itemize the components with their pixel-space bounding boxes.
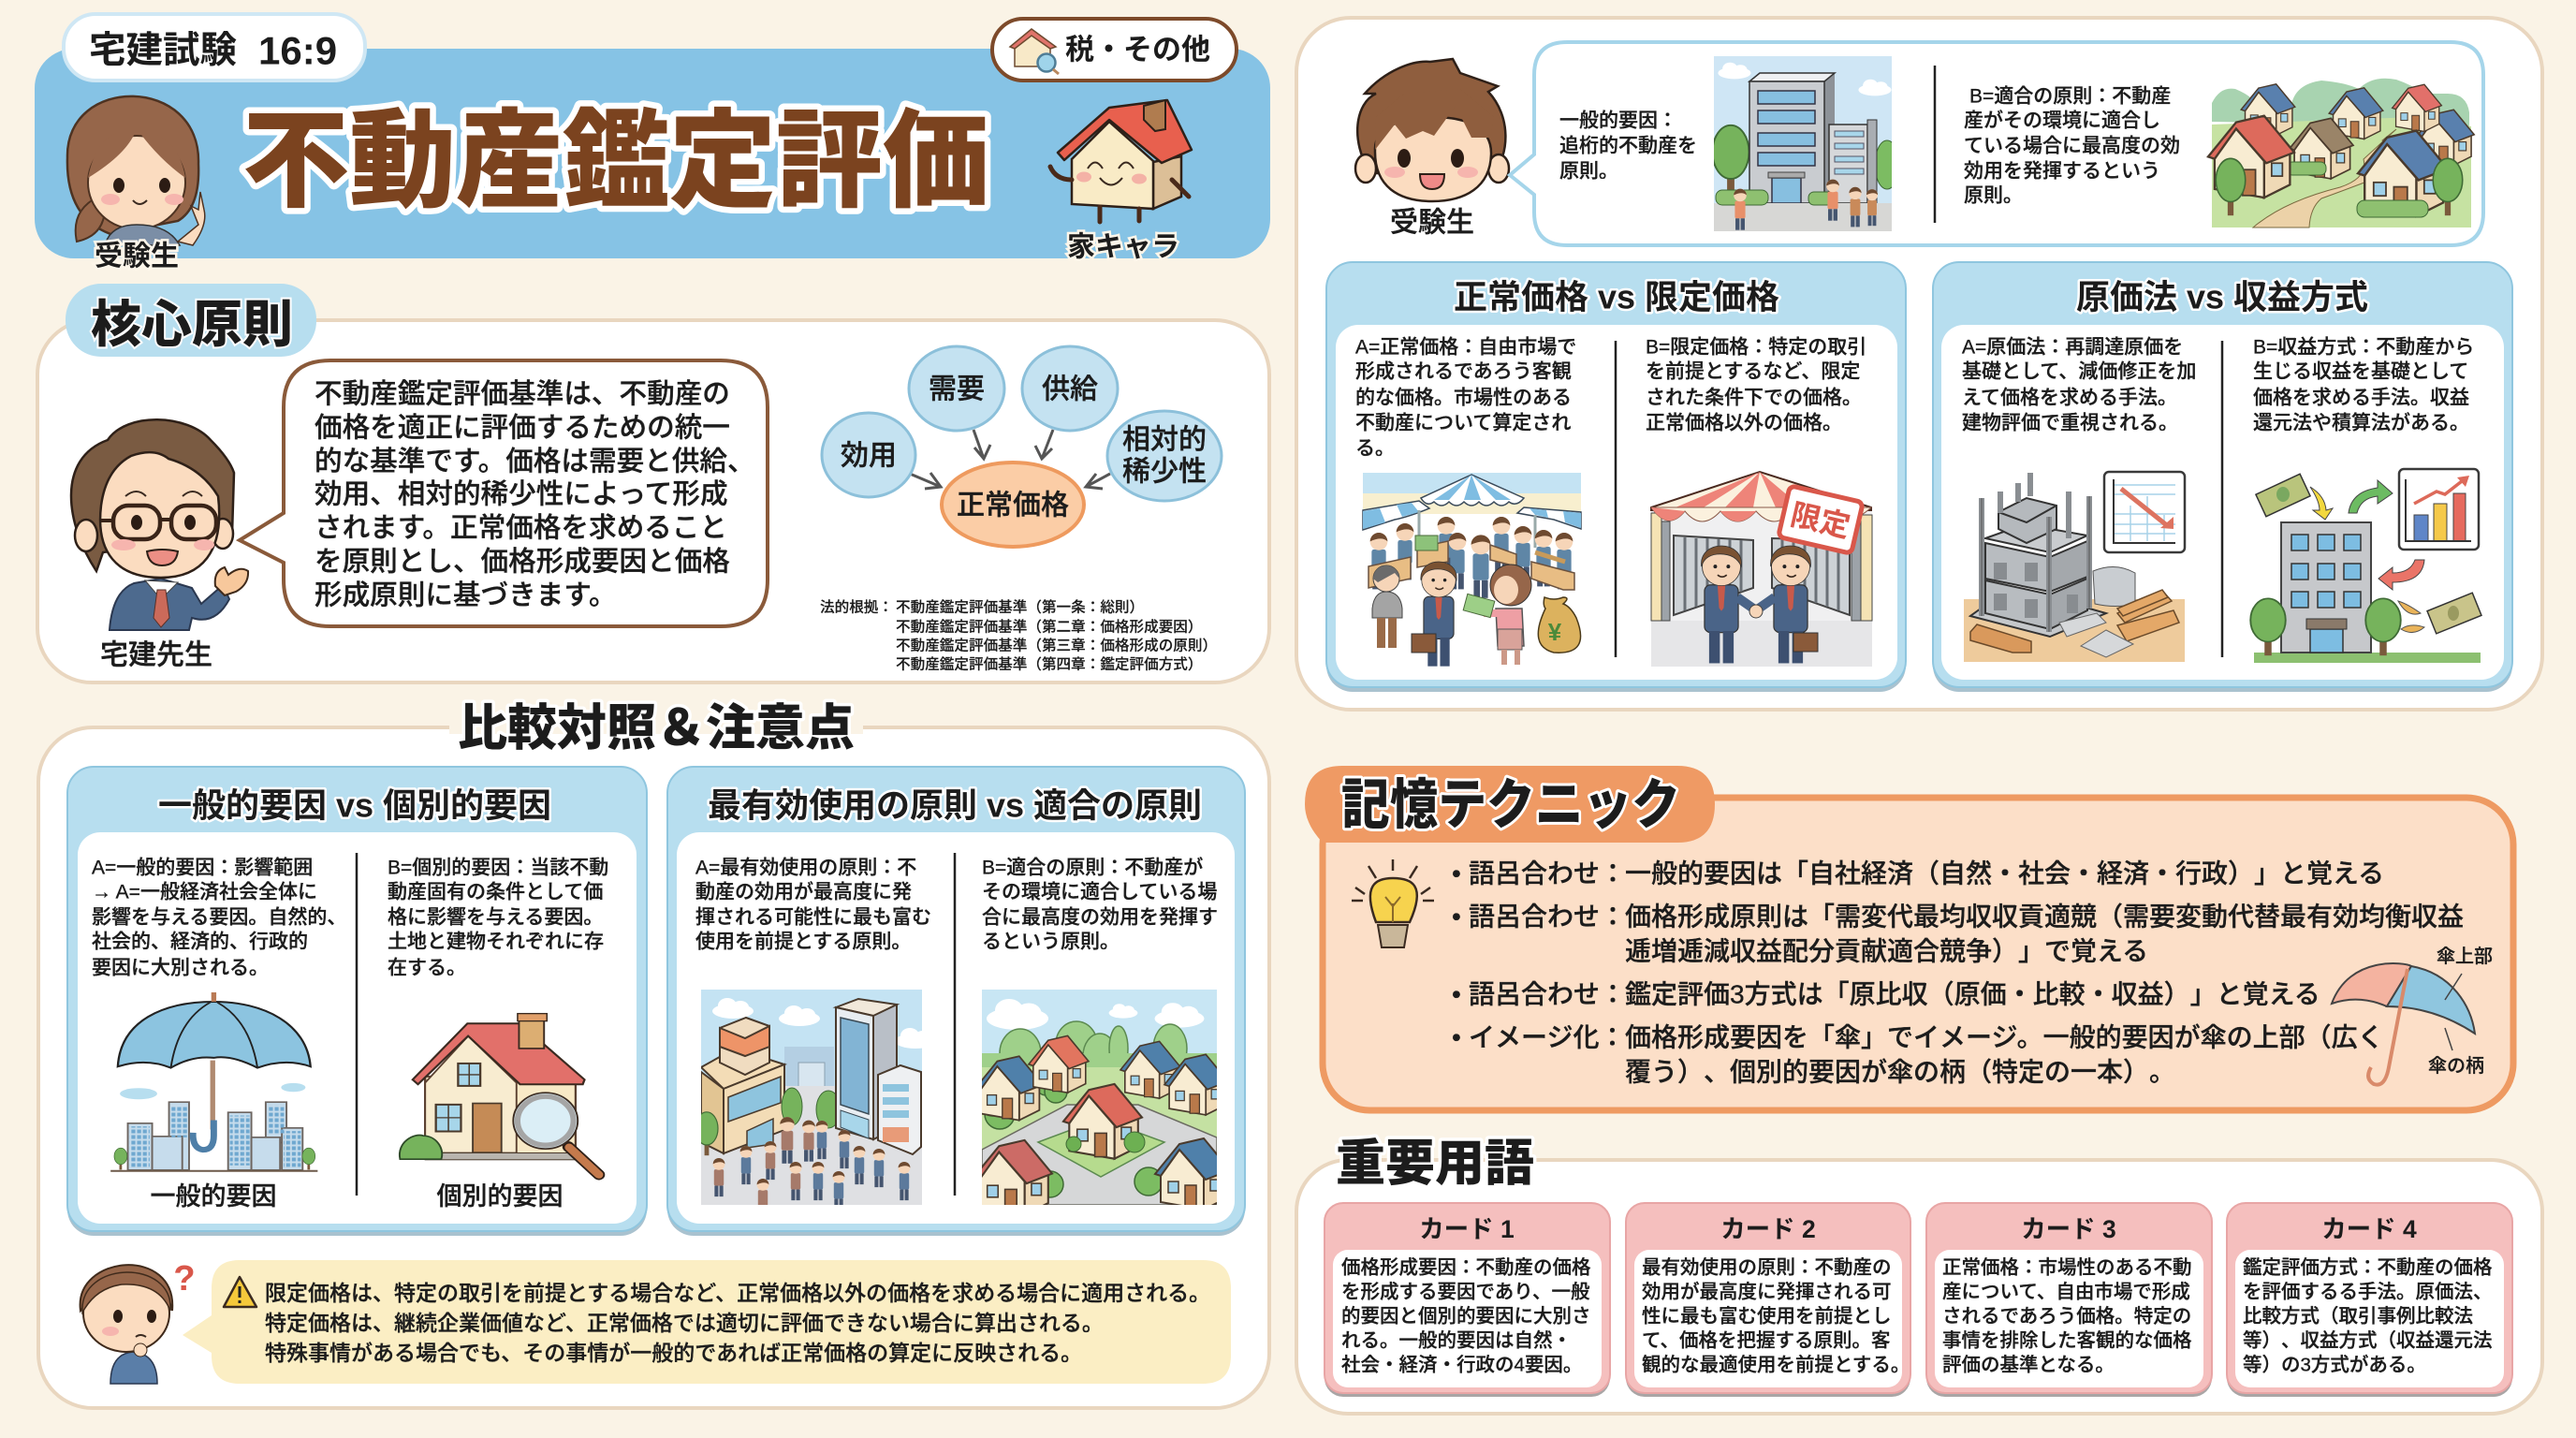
column A text: 社会的、経済的、行政的: [92, 931, 308, 953]
list: mnemonics: 価格形成原則は「需変代最均収収貢適競（需要変動代替最有効均衡収益: [1625, 902, 2464, 931]
column B text: るという原則。: [982, 931, 1120, 953]
speech bubble: core explanation: 価格を適正に評価するための統一: [315, 412, 730, 444]
header banner: [35, 14, 1270, 271]
card 2: [1626, 1203, 1910, 1397]
heading: core principle: [66, 284, 316, 357]
list: mnemonics: 価格形成要因を「傘」でイメージ。一般的要因が傘の上部（広く: [1625, 1022, 2384, 1052]
label: student: 受験生: [1390, 208, 1474, 238]
node: demand: [909, 346, 1004, 431]
label: student: 受験生: [95, 242, 179, 271]
column B text: 合に最高度の効用を発揮す: [982, 906, 1218, 929]
column B text: [388, 858, 608, 979]
heading: comparison: 比較対照＆注意点: [458, 700, 855, 756]
card 1: れる。一般的要因は自然・: [1341, 1329, 1572, 1352]
speech bubble: core explanation: 形成原則に基づきます。: [315, 580, 617, 610]
column B text: 土地と建物それぞれに存: [388, 931, 604, 953]
market buyers: ¥: [1548, 618, 1562, 646]
card 3: カード 3: [2021, 1215, 2116, 1243]
column A text: 基礎として、減価修正を加: [1962, 361, 2196, 382]
image: busy city: [701, 990, 922, 1205]
column A text: 建物評価で重視される。: [1962, 412, 2178, 434]
column B text: B=収益方式：不動産から: [2253, 337, 2474, 358]
column A text: 的な価格。市場性のある: [1355, 388, 1572, 408]
note: general factors: 一般的要因：: [1559, 110, 1677, 131]
card 3: 正常価格：市場性のある不動: [1942, 1256, 2192, 1279]
image: income chart and building: [2250, 469, 2481, 663]
speech bubble: student notes: [1510, 42, 2483, 245]
list: mnemonics: 逓増逓減収益配分貢献適合競争）」で覚える: [1625, 936, 2148, 966]
column A text: 使用を前提とする原則。: [695, 931, 911, 953]
column A text: [92, 858, 346, 979]
note: general factors: 追桁的不動産を: [1559, 135, 1697, 157]
list: mnemonics: 覆う）、個別的要因が傘の柄（特定の一本）。: [1625, 1058, 2175, 1086]
node: demand: 需要: [929, 374, 985, 404]
column A text: [695, 858, 931, 953]
exam tag: 宅建試験: [89, 30, 237, 71]
category pill: 税・その他: [1065, 34, 1210, 66]
card title: 最有効使用の原則 vs 適合の原則: [708, 786, 1202, 824]
node: supply: [1022, 346, 1118, 431]
list: mnemonics: 鑑定評価3方式は「原比収（原価・比較・収益）」と覚える: [1625, 979, 2320, 1009]
card 1: 価格形成要因：不動産の価格: [1341, 1256, 1591, 1279]
speech bubble: core explanation: [240, 360, 768, 626]
image: open market: [1363, 473, 1581, 667]
card 2: 観的な最適使用を前提とする。: [1642, 1354, 1910, 1376]
node: utility: [822, 413, 915, 497]
column B text: 還元法や積算法がある。: [2253, 412, 2469, 434]
node: scarcity: 相対的: [1122, 425, 1207, 455]
column B text: 正常価格以外の価格。: [1646, 412, 1842, 434]
card 4: 比較方式（取引事例比較法: [2243, 1305, 2473, 1328]
card 2: 最有効使用の原則：不動産の: [1642, 1256, 1891, 1279]
speech bubble: core explanation: 不動産鑑定評価基準は、不動産の: [315, 378, 730, 410]
node: utility: 効用: [841, 440, 897, 472]
column A text: A=正常価格：自由市場で: [1355, 337, 1576, 358]
column A text: る。: [1355, 438, 1395, 459]
column A text: A=最有効使用の原則：不: [695, 858, 916, 878]
list: mnemonics: 語呂合わせ：: [1469, 859, 1626, 888]
card 4: 等）の3方式がある。: [2243, 1354, 2426, 1376]
heading: core principle: 核心原則: [91, 297, 293, 353]
list: mnemonics: 一般的要因は「自社経済（自然・社会・経済・行政）」と覚える: [1625, 859, 2384, 888]
column B text: 生じる収益を基礎として: [2253, 361, 2468, 382]
list: mnemonics: •: [1452, 902, 1461, 931]
node: normal price: [942, 462, 1084, 547]
callout: cautions: 限定価格は、特定の取引を前提とする場合など、正常価格以外の価格を求める場合に適用される。: [265, 1281, 1210, 1305]
legal basis: 法的根拠：: [820, 599, 893, 616]
card 3: されるであろう価格。特定の: [1942, 1305, 2191, 1328]
column B text: その環境に適合している場: [982, 882, 1217, 902]
column A text: 動産の効用が最高度に発: [695, 882, 912, 902]
column A text: A=原価法：再調達原価を: [1962, 337, 2183, 358]
note: conformity: B=適合の原則：不動産: [1969, 86, 2171, 107]
card 1: 的要因と個別的要因に大別さ: [1341, 1305, 1591, 1328]
panel: comparison and cautions: [38, 700, 1269, 1408]
callout: cautions: 特殊事情がある場合でも、その事情が一般的であれば正常価格の算定に反映される。: [265, 1341, 1082, 1365]
label: house character: 家キャラ: [1067, 232, 1179, 262]
column A text: 不動産について算定され: [1355, 412, 1571, 434]
card title: 正常価格 vs 限定価格: [1454, 277, 1779, 316]
list: mnemonics: [1452, 859, 2464, 1086]
main title: 不動産鑑定評価: [242, 103, 989, 221]
speech bubble: core explanation: 的な基準です。価格は需要と供給、: [315, 446, 755, 477]
exam tag: [64, 14, 365, 81]
card 1: カード 1: [1419, 1215, 1515, 1243]
legal basis: 不動産鑑定評価基準（第一条：総則）: [896, 599, 1144, 616]
icon: thinking student: [80, 1259, 196, 1384]
note: conformity: 原則。: [1964, 185, 2023, 206]
stamp: limited: 限定: [1788, 497, 1853, 544]
note: conformity: 産がその環境に適合し: [1964, 110, 2160, 131]
node: scarcity: [1107, 411, 1222, 501]
label: general factors: 一般的要因: [150, 1182, 277, 1211]
column B text: 価格を求める手法。収益: [2253, 388, 2469, 408]
card 2: て、価格を把握する原則。客: [1642, 1329, 1890, 1352]
note: conformity: ている場合に最高度の効: [1964, 135, 2180, 157]
column A text: 要因に大別される。: [92, 957, 269, 979]
icon: student boy: [1355, 59, 1509, 201]
column A text: 揮される可能性に最も富む: [695, 906, 931, 929]
market buyers: [1372, 562, 1581, 667]
legal basis: 不動産鑑定評価基準（第四章：鑑定評価方式）: [896, 655, 1202, 672]
legal basis: 不動産鑑定評価基準（第三章：価格形成の原則）: [896, 637, 1217, 653]
column A text: [1355, 337, 1576, 459]
card 4: カード 4: [2321, 1215, 2417, 1243]
diagram: price factors: [822, 346, 1222, 547]
node: scarcity: 稀少性: [1122, 457, 1207, 487]
label: umbrella handle: 傘の柄: [2428, 1055, 2484, 1077]
category pill: [992, 19, 1237, 81]
list: mnemonics: •: [1452, 979, 1461, 1009]
column B text: B=個別的要因：当該不動: [388, 858, 608, 878]
node: normal price: 正常価格: [957, 491, 1069, 521]
speech bubble: core explanation: 効用、相対的稀少性によって形成: [315, 479, 728, 509]
column A text: [1962, 337, 2196, 434]
card 3: 事情を排除した客観的な価格: [1942, 1329, 2192, 1352]
note: general factors: [1559, 110, 1697, 182]
card 3: [1926, 1203, 2212, 1397]
panel: core principle: [37, 284, 1269, 682]
column B text: [2253, 337, 2474, 434]
card: normal vs limited price: [1326, 262, 1906, 692]
card 2: 効用が最高度に発揮される可: [1642, 1281, 1891, 1303]
icon: house character: [1050, 100, 1192, 222]
legal basis: 不動産鑑定評価基準（第二章：価格形成要因）: [896, 618, 1202, 635]
note: conformity: [1964, 86, 2180, 206]
panel: upper right: [1296, 18, 2542, 710]
callout: cautions: 特定価格は、継続企業価値など、正常価格では適切に評価できない場合に算出される。: [265, 1311, 1104, 1335]
exam tag: 16:9: [258, 28, 337, 73]
icon: teacher: [71, 419, 248, 630]
card 2: カード 2: [1720, 1215, 1816, 1243]
icon: warning: [224, 1277, 256, 1307]
column A text: 影響を与える要因。自然的、: [92, 906, 346, 929]
stamp: limited: [1778, 486, 1863, 553]
icon: umbrella diagram: [2332, 946, 2493, 1085]
callout: cautions: [183, 1260, 1231, 1384]
column B text: [982, 858, 1218, 953]
card 4: 鑑定評価方式：不動産の価格: [2243, 1256, 2493, 1279]
image: limited gate: [1651, 472, 1872, 667]
chart: income: [2399, 469, 2479, 550]
column A text: A=一般的要因：影響範囲: [92, 858, 313, 878]
panel: key terms: [1296, 1137, 2542, 1414]
label: umbrella top: 傘上部: [2437, 946, 2493, 967]
column B text: B=限定価格：特定の取引: [1646, 337, 1866, 358]
image: houses: [2208, 79, 2474, 227]
image: office building: [1713, 56, 1899, 231]
card: highest best use vs conformity: [667, 767, 1245, 1236]
column B text: を前提とするなど、限定: [1646, 361, 1860, 382]
list: mnemonics: イメージ化：: [1469, 1022, 1625, 1052]
card 4: [2227, 1203, 2512, 1397]
list: mnemonics: 語呂合わせ：: [1469, 902, 1626, 931]
icon: student girl: [67, 96, 205, 245]
node: supply: 供給: [1042, 374, 1098, 404]
list: mnemonics: •: [1452, 859, 1461, 888]
label: teacher: 宅建先生: [100, 640, 212, 670]
card 1: 社会・経済・行政の4要因。: [1341, 1354, 1582, 1376]
icon: house with magnifier: [400, 1014, 599, 1175]
legal basis: [820, 599, 1217, 672]
card 3: 評価の基準となる。: [1942, 1354, 2115, 1376]
card: cost vs income approach: [1933, 262, 2512, 692]
speech bubble: core explanation: されます。正常価格を求めること: [315, 513, 727, 543]
column B text: された条件下での価格。: [1646, 388, 1862, 408]
card 1: を形成する要因であり、一般: [1341, 1281, 1590, 1303]
card 3: 産について、自由市場で形成: [1942, 1281, 2190, 1303]
card 4: 等）、収益方式（収益還元法: [2243, 1329, 2492, 1352]
column A text: → A=一般経済社会全体に: [92, 882, 317, 902]
speech bubble: core explanation: を原則とし、価格形成要因と価格: [315, 547, 730, 577]
note: general factors: 原則。: [1559, 161, 1618, 182]
card title: 原価法 vs 収益方式: [2076, 277, 2368, 316]
icon: thinking student: ?: [173, 1259, 196, 1299]
card: general vs individual: [67, 767, 647, 1236]
label: individual factors: 個別的要因: [436, 1182, 564, 1211]
column B text: 在する。: [388, 957, 466, 979]
column B text: 動産固有の条件として価: [388, 882, 603, 902]
image: construction and depreciation: [1964, 472, 2185, 662]
column B text: [1646, 337, 1866, 434]
panel: memory techniques: [1305, 766, 2513, 1110]
note: conformity: 効用を発揮するという: [1964, 161, 2160, 182]
heading: key terms: 重要用語: [1336, 1137, 1534, 1191]
column A text: えて価格を求める手法。: [1962, 388, 2177, 408]
column A text: 形成されるであろう客観: [1355, 361, 1572, 382]
chart: depreciation: [2104, 472, 2185, 552]
list: mnemonics: 語呂合わせ：: [1469, 979, 1626, 1009]
column B text: B=適合の原則：不動産が: [982, 858, 1203, 878]
image: conforming neighbourhood: [982, 990, 1217, 1205]
card 4: を評価するる手法。原価法、: [2243, 1281, 2492, 1303]
card 1: [1325, 1203, 1610, 1397]
column B text: 格に影響を与える要因。: [388, 906, 603, 929]
icon: light bulb: [1352, 859, 1434, 947]
list: mnemonics: •: [1452, 1022, 1461, 1052]
card title: 一般的要因 vs 個別的要因: [158, 786, 551, 824]
card 2: 性に最も富む使用を前提とし: [1642, 1305, 1891, 1328]
heading: memory techniques: 記憶テクニック: [1341, 775, 1680, 835]
icon: umbrella over city: [110, 992, 317, 1171]
